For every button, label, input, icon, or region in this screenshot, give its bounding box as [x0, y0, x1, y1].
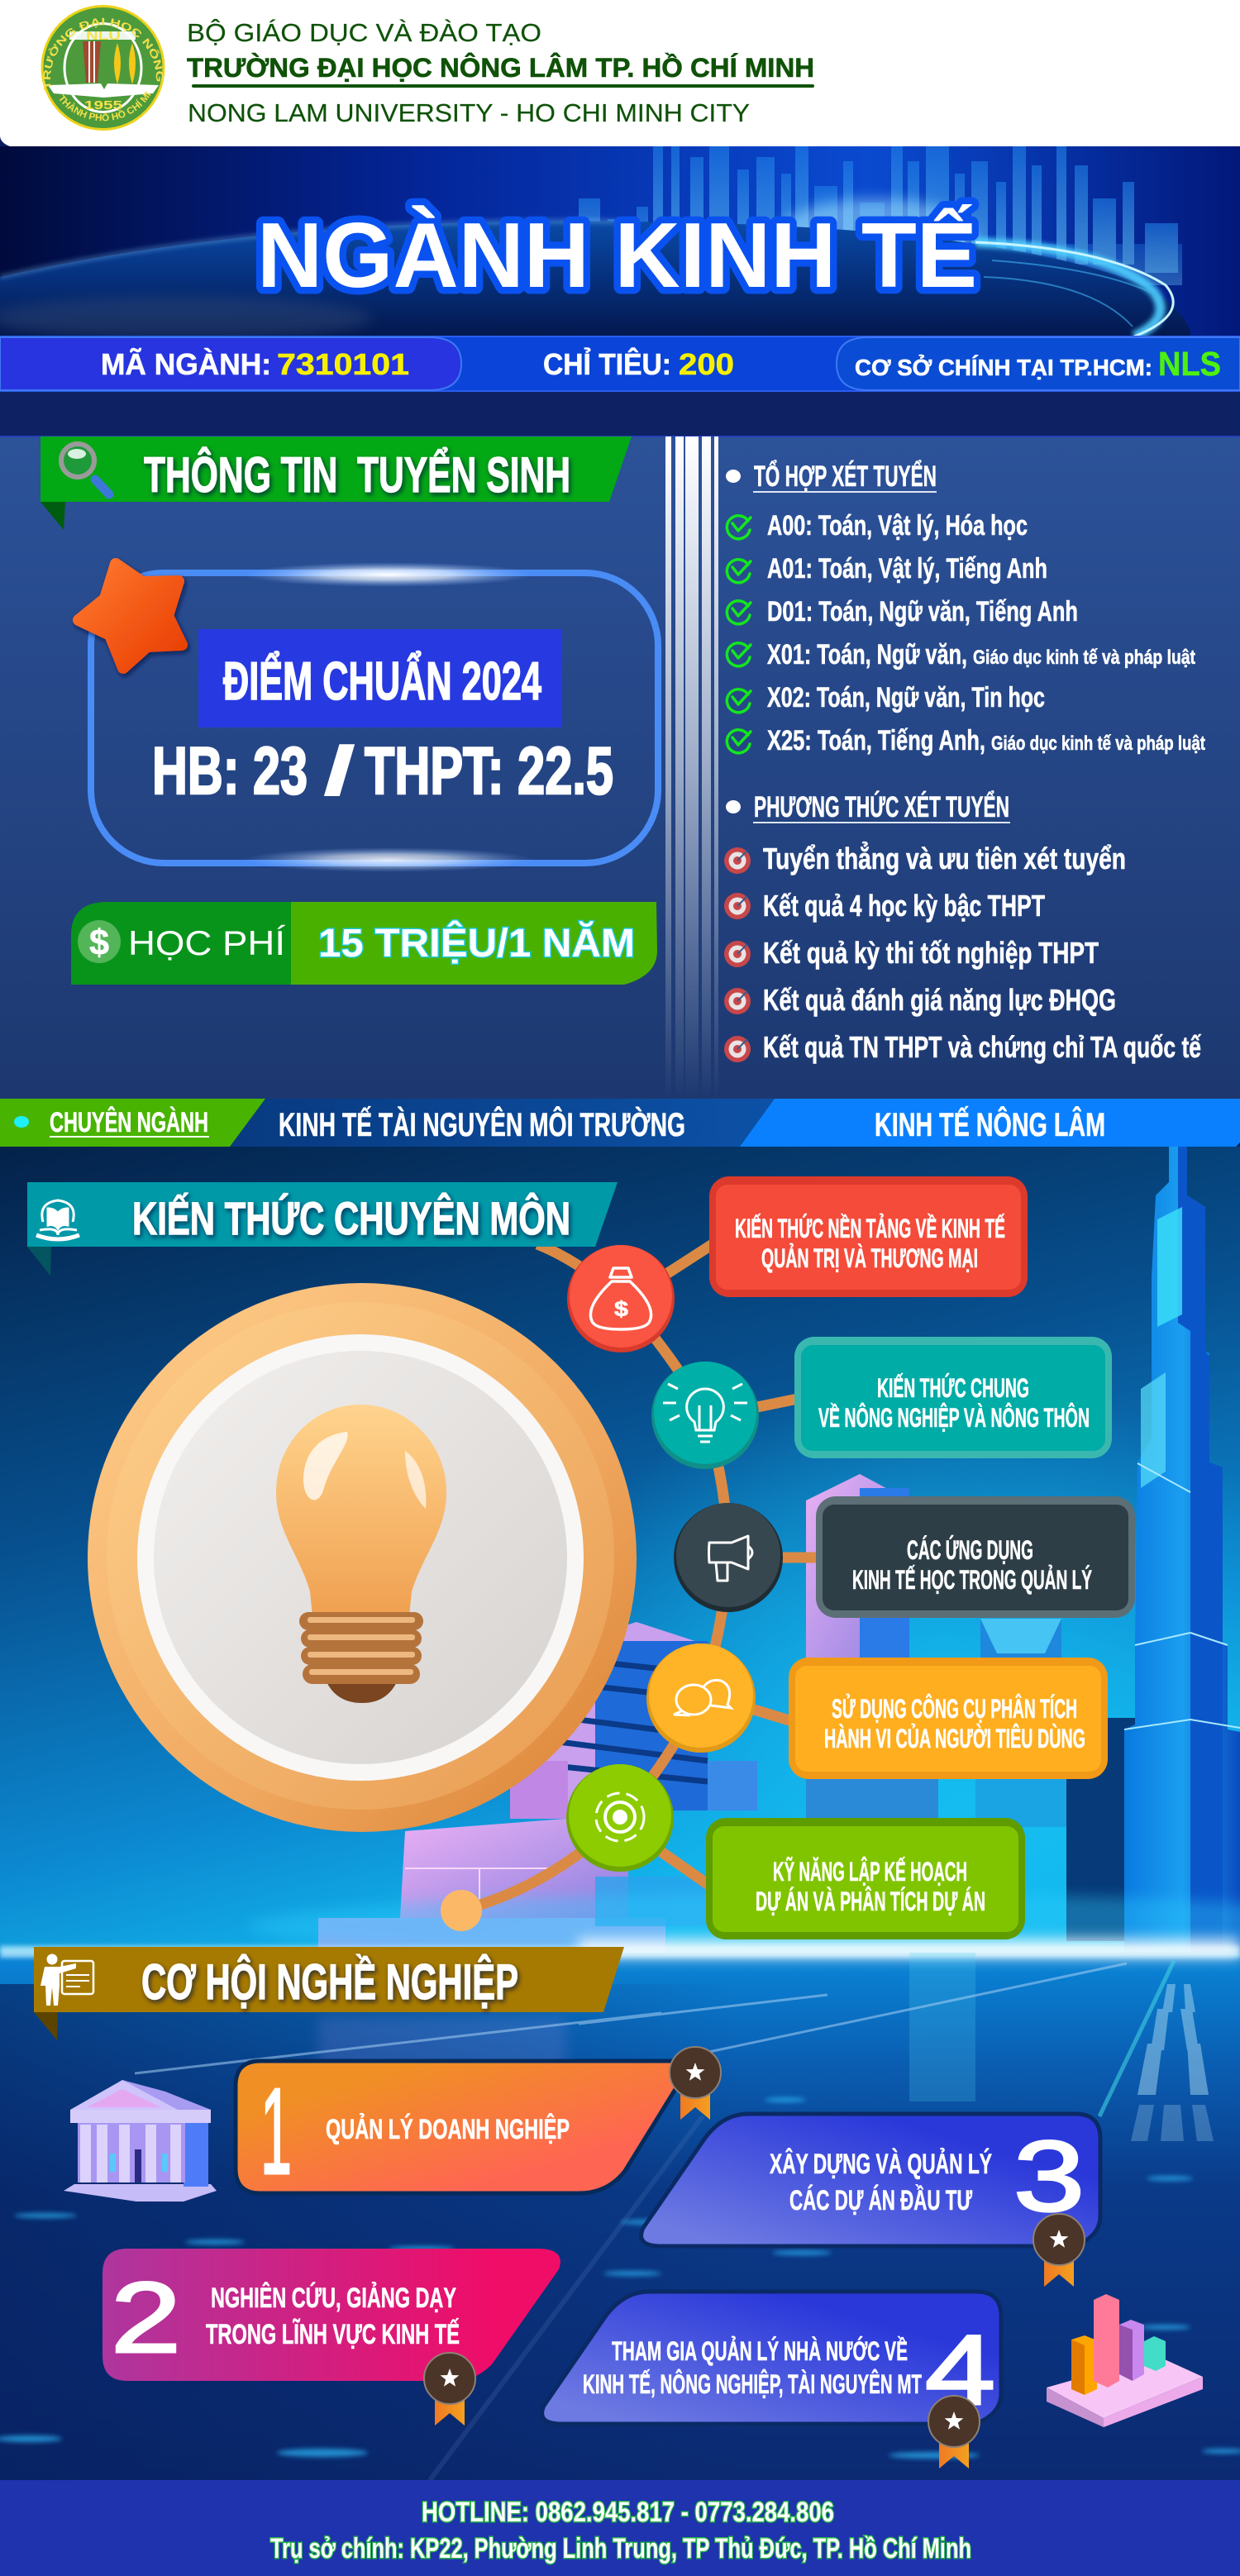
text: campus: NLS — [1158, 345, 1221, 383]
illustration: light bulb disc — [88, 1283, 637, 1832]
tuition bar: 15 TRIỆU/1 NĂM — [318, 920, 635, 966]
box: agriculture knowledge: KIẾN THỨC CHUNG — [877, 1373, 1029, 1403]
icon: orange star — [79, 564, 182, 668]
list: subject combinations: A00: Toán, Vật lý, Hóa học — [767, 510, 1028, 541]
earth — [0, 222, 1190, 336]
horizon glow — [0, 1946, 1240, 1958]
text: specialization 2: KINH TẾ NÔNG LÂM — [875, 1105, 1105, 1143]
box: economics applications: CÁC ỨNG DỤNG — [907, 1535, 1033, 1565]
ribbon heading: careers: CƠ HỘI NGHỀ NGHIỆP — [141, 1954, 518, 2010]
text: scores: THPT: 22.5 — [365, 734, 613, 809]
box: business foundations: QUẢN TRỊ VÀ THƯƠNG MẠI — [761, 1243, 978, 1273]
text: major code — [101, 346, 409, 381]
icon: university logo: 1955 — [84, 98, 122, 112]
ribbon heading: knowledge — [27, 1182, 618, 1276]
icon: open book — [36, 1200, 79, 1239]
text: address: Trụ sở chính: KP22, Phường Linh Trung, TP Thủ Đức, TP. Hồ Chí Minh — [270, 2533, 971, 2564]
box: project planning: DỰ ÁN VÀ PHÂN TÍCH DỰ ÁN — [756, 1887, 985, 1916]
node: money bag — [567, 1245, 675, 1352]
text: specialization label — [14, 1107, 209, 1138]
node: chat — [646, 1643, 756, 1753]
connector lines — [461, 1244, 820, 1911]
list: subject combinations: X25: Toán, Tiếng Anh, — [767, 725, 985, 756]
heading: combinations — [726, 460, 937, 493]
card 2: research and teaching: NGHIÊN CỨU, GIẢNG DẠY — [211, 2283, 456, 2314]
badge — [424, 2353, 475, 2426]
background: futuristic city and floor — [0, 1147, 1240, 2480]
text: major code: 7310101 — [277, 347, 409, 381]
card 3: investment projects: 3 — [1013, 2120, 1085, 2232]
tuition bar: HỌC PHÍ — [128, 923, 285, 962]
text: scores — [152, 734, 613, 809]
list: admission methods: Kết quả 4 học kỳ bậc THPT — [763, 889, 1045, 923]
title: NGÀNH KINH TẾ — [257, 204, 977, 307]
icon: magnifier — [61, 444, 109, 494]
card 3: investment projects: XÂY DỰNG VÀ QUẢN LÝ — [770, 2149, 992, 2180]
label: benchmark year — [198, 629, 562, 727]
box: agriculture knowledge — [794, 1337, 1112, 1458]
list: admission methods: Kết quả đánh giá năng lực ĐHQG — [763, 983, 1116, 1017]
node: megaphone — [674, 1503, 783, 1612]
text: scores: / — [325, 734, 354, 809]
icon: classical building — [64, 2080, 217, 2202]
node: target ring — [566, 1764, 674, 1872]
icon: bulb — [276, 1405, 446, 1703]
icon: presenter — [41, 1954, 93, 2006]
box: business foundations — [709, 1176, 1028, 1297]
panel: benchmark scores — [79, 562, 658, 872]
label: benchmark year: ĐIỂM CHUẨN 2024 — [223, 651, 541, 711]
tuition bar — [71, 902, 657, 985]
icon: dollar: $ — [89, 923, 109, 963]
box: project planning — [706, 1818, 1025, 1939]
card 4: state management: THAM GIA QUẢN LÝ NHÀ NƯỚC VỀ — [612, 2336, 908, 2366]
ribbon heading: careers — [34, 1947, 624, 2040]
ribbon heading: admissions: THÔNG TIN TUYỂN SINH — [144, 447, 570, 503]
city skyline — [579, 146, 1182, 285]
info bar: code, quota, campus — [0, 336, 1240, 391]
card 3: investment projects — [641, 2114, 1100, 2287]
list: subject combinations: X02: Toán, Ngữ văn, Tin học — [767, 682, 1045, 713]
text: ministry: BỘ GIÁO DỤC VÀ ĐÀO TẠO — [187, 18, 541, 47]
card 2: research and teaching — [103, 2249, 560, 2426]
heading: methods — [726, 790, 1010, 823]
box: consumer analysis — [789, 1658, 1108, 1779]
panel: career opportunities — [34, 1947, 1203, 2469]
icon: dollar — [78, 920, 121, 963]
target icons — [724, 847, 751, 1062]
text: specialization label: CHUYÊN NGÀNH — [50, 1107, 208, 1138]
text: scores: HB: 23 — [152, 734, 308, 809]
card 4: state management: KINH TẾ, NÔNG NGHIỆP, TÀI NGUYÊN MT — [583, 2369, 922, 2399]
text: quota: 200 — [679, 347, 734, 381]
list: admission methods: Tuyển thẳng và ưu tiên xét tuyển — [763, 841, 1126, 875]
footer: contact — [0, 2480, 1240, 2576]
building: striped block — [510, 1622, 757, 1819]
text: campus: CƠ SỞ CHÍNH TẠI TP.HCM: — [855, 354, 1152, 380]
card 1: business management: QUẢN LÝ DOANH NGHIỆP — [326, 2114, 570, 2145]
badge — [928, 2396, 980, 2469]
banner: title with earth and city — [0, 146, 1240, 340]
node: idea bulb — [651, 1362, 759, 1469]
list: subject combinations — [726, 460, 1205, 756]
list: subject combinations: X01: Toán, Ngữ văn, — [767, 639, 967, 670]
list: subject combinations: A01: Toán, Vật lý, Tiếng Anh — [767, 553, 1047, 584]
card 4: state management — [542, 2292, 1001, 2469]
building: lilac podium — [318, 1819, 719, 1953]
card 4: state management: 4 — [925, 2315, 995, 2426]
connector end dot — [441, 1890, 482, 1931]
box: consumer analysis: SỬ DỤNG CÔNG CỤ PHÂN TÍCH — [832, 1694, 1077, 1724]
card 1: business management — [236, 2047, 721, 2200]
node: money bag: $ — [614, 1296, 629, 1321]
text: university name: TRƯỜNG ĐẠI HỌC NÔNG LÂM TP. HỒ CHÍ MINH — [187, 53, 814, 83]
check icons — [727, 516, 751, 753]
header: university identity — [0, 0, 1240, 146]
decorative stripes — [665, 436, 718, 1098]
panel: professional knowledge — [27, 1176, 1135, 1939]
icon: university logo — [41, 5, 165, 131]
badge — [670, 2047, 721, 2120]
icon: 3D bar chart — [1047, 2294, 1203, 2427]
box: business foundations: KIẾN THỨC NỀN TẢNG VỀ KINH TẾ — [735, 1214, 1005, 1243]
box: project planning: KỸ NĂNG LẬP KẾ HOẠCH — [773, 1857, 967, 1887]
text: specialization 1: KINH TẾ TÀI NGUYÊN MÔI TRƯỜNG — [279, 1105, 685, 1143]
building: purple tower — [806, 1474, 1240, 1943]
building: skyscraper — [1124, 1147, 1240, 1953]
heading: combinations: TỔ HỢP XÉT TUYỂN — [754, 460, 937, 493]
card 2: research and teaching: 2 — [111, 2261, 181, 2373]
text: hotline: HOTLINE: 0862.945.817 - 0773.284.806 — [422, 2497, 834, 2528]
text: english name: NONG LAM UNIVERSITY - HO CHI MINH CITY — [188, 98, 750, 127]
card 3: investment projects: CÁC DỰ ÁN ĐẦU TƯ — [789, 2185, 973, 2216]
card 2: research and teaching: TRONG LĨNH VỰC KINH TẾ — [206, 2319, 460, 2350]
ribbon heading: admissions — [41, 436, 632, 530]
list: admission methods — [724, 790, 1202, 1064]
box: consumer analysis: HÀNH VI CỦA NGƯỜI TIÊU DÙNG — [824, 1724, 1085, 1753]
list: subject combinations: D01: Toán, Ngữ văn, Tiếng Anh — [767, 596, 1078, 627]
badge — [1033, 2214, 1085, 2287]
text: major code: MÃ NGÀNH: — [101, 346, 271, 381]
ribbon heading: knowledge: KIẾN THỨC CHUYÊN MÔN — [132, 1192, 570, 1244]
specialization bar — [0, 1099, 1240, 1147]
panel: admissions information — [0, 436, 1240, 1099]
list: admission methods: Kết quả kỳ thi tốt nghiệp THPT — [763, 936, 1099, 970]
text: campus — [855, 345, 1221, 383]
card 1: business management: 1 — [260, 2063, 292, 2200]
text: quota: CHỈ TIÊU: — [543, 346, 671, 381]
icon: university logo: NLU — [86, 29, 121, 43]
heading: methods: PHƯƠNG THỨC XÉT TUYỂN — [754, 790, 1009, 823]
floor reflections and lines — [0, 1953, 1240, 2480]
box: economics applications — [816, 1496, 1135, 1618]
